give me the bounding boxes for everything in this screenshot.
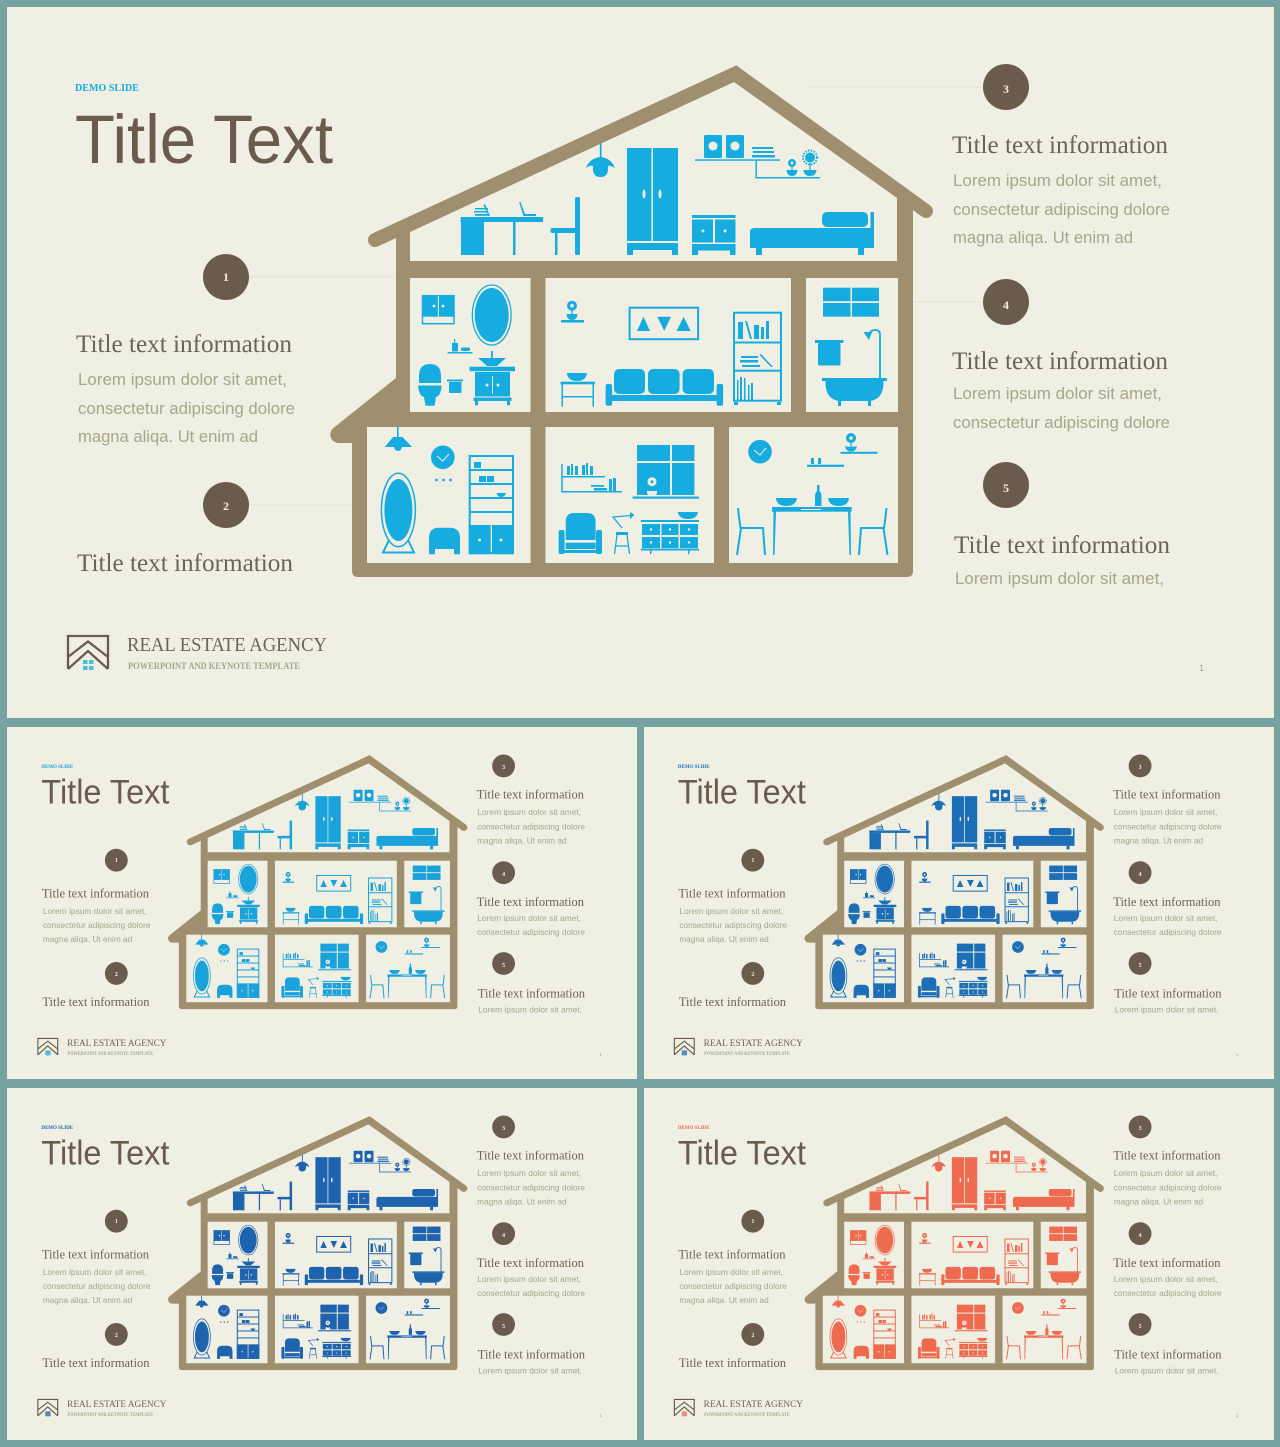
slide content: light blue variant: Title text information (42, 995, 150, 1009)
callout 1: Lorem ipsum dolor sit amet, (78, 370, 287, 389)
slide content: mid blue variant: POWERPOINT AND KEYNOTE TEMPLATE (704, 1052, 790, 1057)
icon: stool (429, 528, 460, 554)
callout 2 (77, 482, 352, 577)
icon: bookcase (734, 313, 781, 405)
slide content: coral variant: Title text information (1113, 1149, 1221, 1163)
slide content: mid blue variant: Title text information (1113, 788, 1221, 802)
slide content: dark blue variant: REAL ESTATE AGENCY (67, 1399, 166, 1410)
icon: nightstand (692, 215, 736, 255)
panel: light blue variant (7, 727, 637, 1079)
slide content: coral variant: Title text information (1113, 1256, 1221, 1270)
slide content: coral variant: consectetur adipiscing dolore (1114, 1288, 1222, 1298)
icon: three dots (435, 479, 452, 481)
icon: armchair (559, 513, 602, 554)
icon: shower (864, 330, 880, 378)
callout 3: 3 (1003, 82, 1009, 96)
callout 1 (76, 254, 395, 446)
slide content: dark blue variant: Title text information (477, 1149, 585, 1163)
slide content: dark blue variant: Title text information (42, 1247, 150, 1261)
slide content: dark blue variant: 5 (502, 1324, 505, 1330)
slide content: light blue variant: consectetur adipiscing dolore (43, 920, 151, 930)
slide content: mid blue variant: 3 (1139, 765, 1142, 771)
icon: standing mirror (381, 473, 415, 552)
slide content: dark blue variant: consectetur adipiscing dolore (477, 1182, 585, 1192)
slide content: light blue variant: 1 (599, 1052, 602, 1057)
slide content: mid blue variant: Lorem ipsum dolor sit amet, (1114, 913, 1218, 923)
room: bathtub (815, 288, 887, 406)
slide content: coral variant: Lorem ipsum dolor sit amet, (1114, 1168, 1218, 1178)
page number: 1 (1199, 663, 1204, 673)
slide content: mid blue variant: consectetur adipiscing dolore (679, 920, 787, 930)
slide content: light blue variant: REAL ESTATE AGENCY (67, 1038, 166, 1049)
slide content: light blue variant: Lorem ipsum dolor sit amet, (478, 1005, 582, 1015)
slide content: dark blue variant: Lorem ipsum dolor sit amet, (43, 1267, 147, 1277)
slide content: dark blue variant: Title text information (478, 1347, 586, 1361)
icon: stool with desk lamp (613, 512, 634, 554)
slide content: light blue variant: 3 (502, 765, 505, 771)
icon: wardrobe (627, 148, 678, 255)
room: bathroom sink (418, 285, 515, 406)
callout 4 (913, 279, 1170, 432)
slide content: mid blue variant: 2 (751, 972, 754, 978)
panel: mid blue variant (644, 727, 1274, 1079)
slide content: dark blue variant: consectetur adipiscing dolore (477, 1288, 585, 1298)
slide content: light blue variant: consectetur adipiscing dolore (477, 927, 585, 937)
room: hallway (381, 427, 514, 554)
icon: window (823, 288, 879, 317)
icon: small shelf with cup (448, 339, 472, 354)
slide content: coral variant: 1 (751, 1219, 754, 1225)
slide content: coral variant: consectetur adipiscing dolore (1114, 1182, 1222, 1192)
slide content: mid blue variant: Lorem ipsum dolor sit amet, (1114, 807, 1218, 817)
slide content: light blue variant: magna aliqa. Ut enim ad (43, 934, 132, 944)
slide content: mid blue variant: consectetur adipiscing dolore (1114, 821, 1222, 831)
slide content: dark blue variant: 1 (115, 1219, 118, 1225)
slide content: dark blue variant: DEMO SLIDE (41, 1125, 73, 1131)
slide content: light blue variant (38, 754, 602, 1057)
panel: dark blue variant (7, 1088, 637, 1440)
slide content: dark blue variant: consectetur adipiscing dolore (43, 1281, 151, 1291)
icon: bed (750, 212, 874, 255)
room: living room (560, 301, 781, 407)
slide content: dark blue variant: 3 (502, 1126, 505, 1132)
callout 3: magna aliqa. Ut enim ad (953, 228, 1133, 247)
icon: oval mirror (472, 285, 511, 345)
callout 5: Lorem ipsum dolor sit amet, (955, 569, 1164, 588)
slide content: mid blue variant: Title Text (678, 774, 806, 812)
slide content: light blue variant: 4 (502, 872, 505, 878)
title: Title Text (75, 101, 333, 178)
slide content: dark blue variant: Lorem ipsum dolor sit amet, (478, 1366, 582, 1376)
slide content: mid blue variant: Title text information (1114, 986, 1222, 1000)
callout 4: Lorem ipsum dolor sit amet, (953, 384, 1162, 403)
callout 2: Title text information (77, 550, 294, 577)
slide content: mid blue variant: 1 (1236, 1052, 1239, 1057)
icon: toilet (418, 364, 442, 406)
icon: dresser with bowl (641, 512, 699, 554)
slide content: light blue variant: Title Text (41, 774, 170, 812)
callout 5: 5 (1003, 481, 1009, 495)
slide content: coral variant: 1 (1236, 1413, 1239, 1418)
icon: side table with bowl (560, 373, 595, 407)
slide content: coral variant: Title text information (678, 1247, 786, 1261)
slide content: dark blue variant: Lorem ipsum dolor sit amet, (477, 1168, 581, 1178)
slide content: coral variant: Title text information (1114, 1347, 1222, 1361)
icon: tall shelving unit (469, 456, 514, 554)
slide content: coral variant: Title text information (679, 1356, 787, 1370)
slide content: coral variant: REAL ESTATE AGENCY (704, 1399, 803, 1410)
slide content: light blue variant: POWERPOINT AND KEYNOTE TEMPLATE (68, 1052, 153, 1057)
slide content: dark blue variant: Lorem ipsum dolor sit amet, (477, 1274, 581, 1284)
icon: waste bin (447, 380, 463, 393)
slide content: coral variant: magna aliqa. Ut enim ad (1114, 1196, 1203, 1206)
slide content: coral variant: POWERPOINT AND KEYNOTE TEMPLATE (704, 1413, 790, 1418)
callout 4: consectetur adipiscing dolore (953, 413, 1170, 432)
icon: wall book shelf (562, 463, 622, 492)
icon: pendant lamp (385, 427, 412, 451)
slide content: light blue variant: Title text information (477, 788, 585, 802)
slide content: mid blue variant: Lorem ipsum dolor sit amet, (679, 906, 783, 916)
icon: large window with flower (633, 445, 699, 499)
house cutaway illustration (330, 74, 926, 577)
icon: dining chairs (737, 508, 888, 555)
room: attic bedroom (461, 135, 874, 255)
eyebrow label: DEMO SLIDE (75, 82, 139, 94)
slide content: mid blue variant: 5 (1139, 963, 1142, 969)
icon: potted flowers (786, 150, 817, 176)
slide content: coral variant: DEMO SLIDE (678, 1125, 710, 1131)
slide content: light blue variant: Lorem ipsum dolor sit amet, (477, 807, 581, 817)
slide content: dark blue variant: magna aliqa. Ut enim ad (43, 1295, 132, 1305)
slide content: mid blue variant: 1 (751, 858, 754, 864)
icon: vanity (470, 351, 515, 405)
slide content: mid blue variant: magna aliqa. Ut enim ad (679, 934, 769, 944)
slide content: mid blue variant: magna aliqa. Ut enim ad (1114, 835, 1203, 845)
callout 1: Title text information (76, 331, 293, 358)
callout 5: Title text information (954, 532, 1171, 559)
logo (68, 634, 327, 672)
logo: REAL ESTATE AGENCY (127, 634, 327, 656)
slide content: light blue variant: 2 (115, 972, 118, 978)
slide content: mid blue variant: Title text information (678, 886, 786, 900)
slide content: coral variant: Lorem ipsum dolor sit amet, (679, 1267, 783, 1277)
slide content: mid blue variant (674, 754, 1239, 1057)
slide content: mid blue variant: DEMO SLIDE (678, 764, 710, 770)
slide content: light blue variant: Title text information (477, 895, 585, 909)
callout 3: Lorem ipsum dolor sit amet, (953, 171, 1162, 190)
icon: wall picture (630, 308, 698, 339)
icon: chair (550, 197, 580, 255)
slide content: light blue variant: 1 (115, 858, 118, 864)
slide content: coral variant: Lorem ipsum dolor sit amet, (1114, 1274, 1218, 1284)
slide content: light blue variant: DEMO SLIDE (41, 764, 73, 770)
slide content: light blue variant: magna aliqa. Ut enim ad (477, 835, 567, 845)
slide content: mid blue variant: REAL ESTATE AGENCY (704, 1038, 803, 1049)
icon: wall clock (748, 440, 772, 464)
slide content: light blue variant: 5 (502, 963, 505, 969)
slide content: light blue variant: Title text information (478, 986, 586, 1000)
slide content: dark blue variant: 4 (502, 1233, 505, 1239)
slide content: light blue variant: Lorem ipsum dolor sit amet, (477, 913, 581, 923)
icon: wall cabinet (422, 296, 454, 324)
slide content: mid blue variant: Title text information (1113, 895, 1221, 909)
slide content: dark blue variant: magna aliqa. Ut enim ad (477, 1196, 567, 1206)
slide content: light blue variant: Title text information (42, 886, 150, 900)
slide content: coral variant (674, 1115, 1239, 1418)
room: lounge (559, 445, 699, 554)
slide content: dark blue variant (38, 1115, 602, 1418)
slide content: coral variant: 4 (1139, 1233, 1142, 1239)
slide content: dark blue variant: 2 (115, 1333, 118, 1339)
slide content: coral variant: Lorem ipsum dolor sit amet, (1115, 1366, 1219, 1376)
slide content: dark blue variant: Title text information (42, 1356, 150, 1370)
icon: desk with books and laptop (461, 202, 543, 255)
icon: bathtub (822, 378, 887, 406)
slide content: coral variant: Title Text (678, 1135, 806, 1173)
panel: coral variant (644, 1088, 1274, 1440)
icon: wall flower shelf (561, 301, 584, 322)
icon: dining table (772, 485, 852, 555)
house structure (330, 74, 926, 577)
icon: flower shelf (840, 433, 878, 454)
slide content: coral variant: magna aliqa. Ut enim ad (679, 1295, 769, 1305)
icon: towel rack (815, 340, 844, 366)
slide content: mid blue variant: 4 (1139, 872, 1142, 878)
callout 3: consectetur adipiscing dolore (953, 200, 1170, 219)
slide content: mid blue variant: Lorem ipsum dolor sit amet, (1115, 1005, 1219, 1015)
slide content: mid blue variant: consectetur adipiscing dolore (1114, 927, 1222, 937)
callout 1: consectetur adipiscing dolore (78, 399, 295, 418)
slide content: dark blue variant: POWERPOINT AND KEYNOTE TEMPLATE (68, 1413, 153, 1418)
slide content: dark blue variant: Title text information (477, 1256, 585, 1270)
slide content: light blue variant: Lorem ipsum dolor sit amet, (43, 906, 147, 916)
slide content: dark blue variant: 1 (599, 1413, 602, 1418)
room: dining room (737, 433, 888, 555)
icon: speakers and wall shelf (695, 135, 820, 178)
slide content: light blue variant: consectetur adipiscing dolore (477, 821, 585, 831)
slide content: coral variant: 3 (1139, 1126, 1142, 1132)
slide content: coral variant: 2 (751, 1333, 754, 1339)
callout 1: magna aliqa. Ut enim ad (78, 427, 258, 446)
slide content: coral variant: consectetur adipiscing dolore (679, 1281, 787, 1291)
icon: pendant lamp (586, 143, 615, 177)
slide content: dark blue variant: Title Text (41, 1135, 170, 1173)
slide content: coral variant: 5 (1139, 1324, 1142, 1330)
callout 3 (810, 64, 1170, 247)
icon: wall clock (431, 446, 455, 469)
panel: main slide (7, 7, 1274, 718)
callout 5 (954, 462, 1171, 588)
callout 1: 1 (223, 270, 229, 284)
icon: small wall shelf (807, 458, 844, 467)
icon: sofa (606, 369, 723, 406)
callout 4: 4 (1003, 298, 1009, 312)
callout 3: Title text information (952, 132, 1169, 159)
slide content: mid blue variant: Title text information (679, 995, 787, 1009)
callout 4: Title text information (952, 348, 1169, 375)
logo: POWERPOINT AND KEYNOTE TEMPLATE (128, 662, 300, 672)
callout 2: 2 (223, 499, 229, 513)
